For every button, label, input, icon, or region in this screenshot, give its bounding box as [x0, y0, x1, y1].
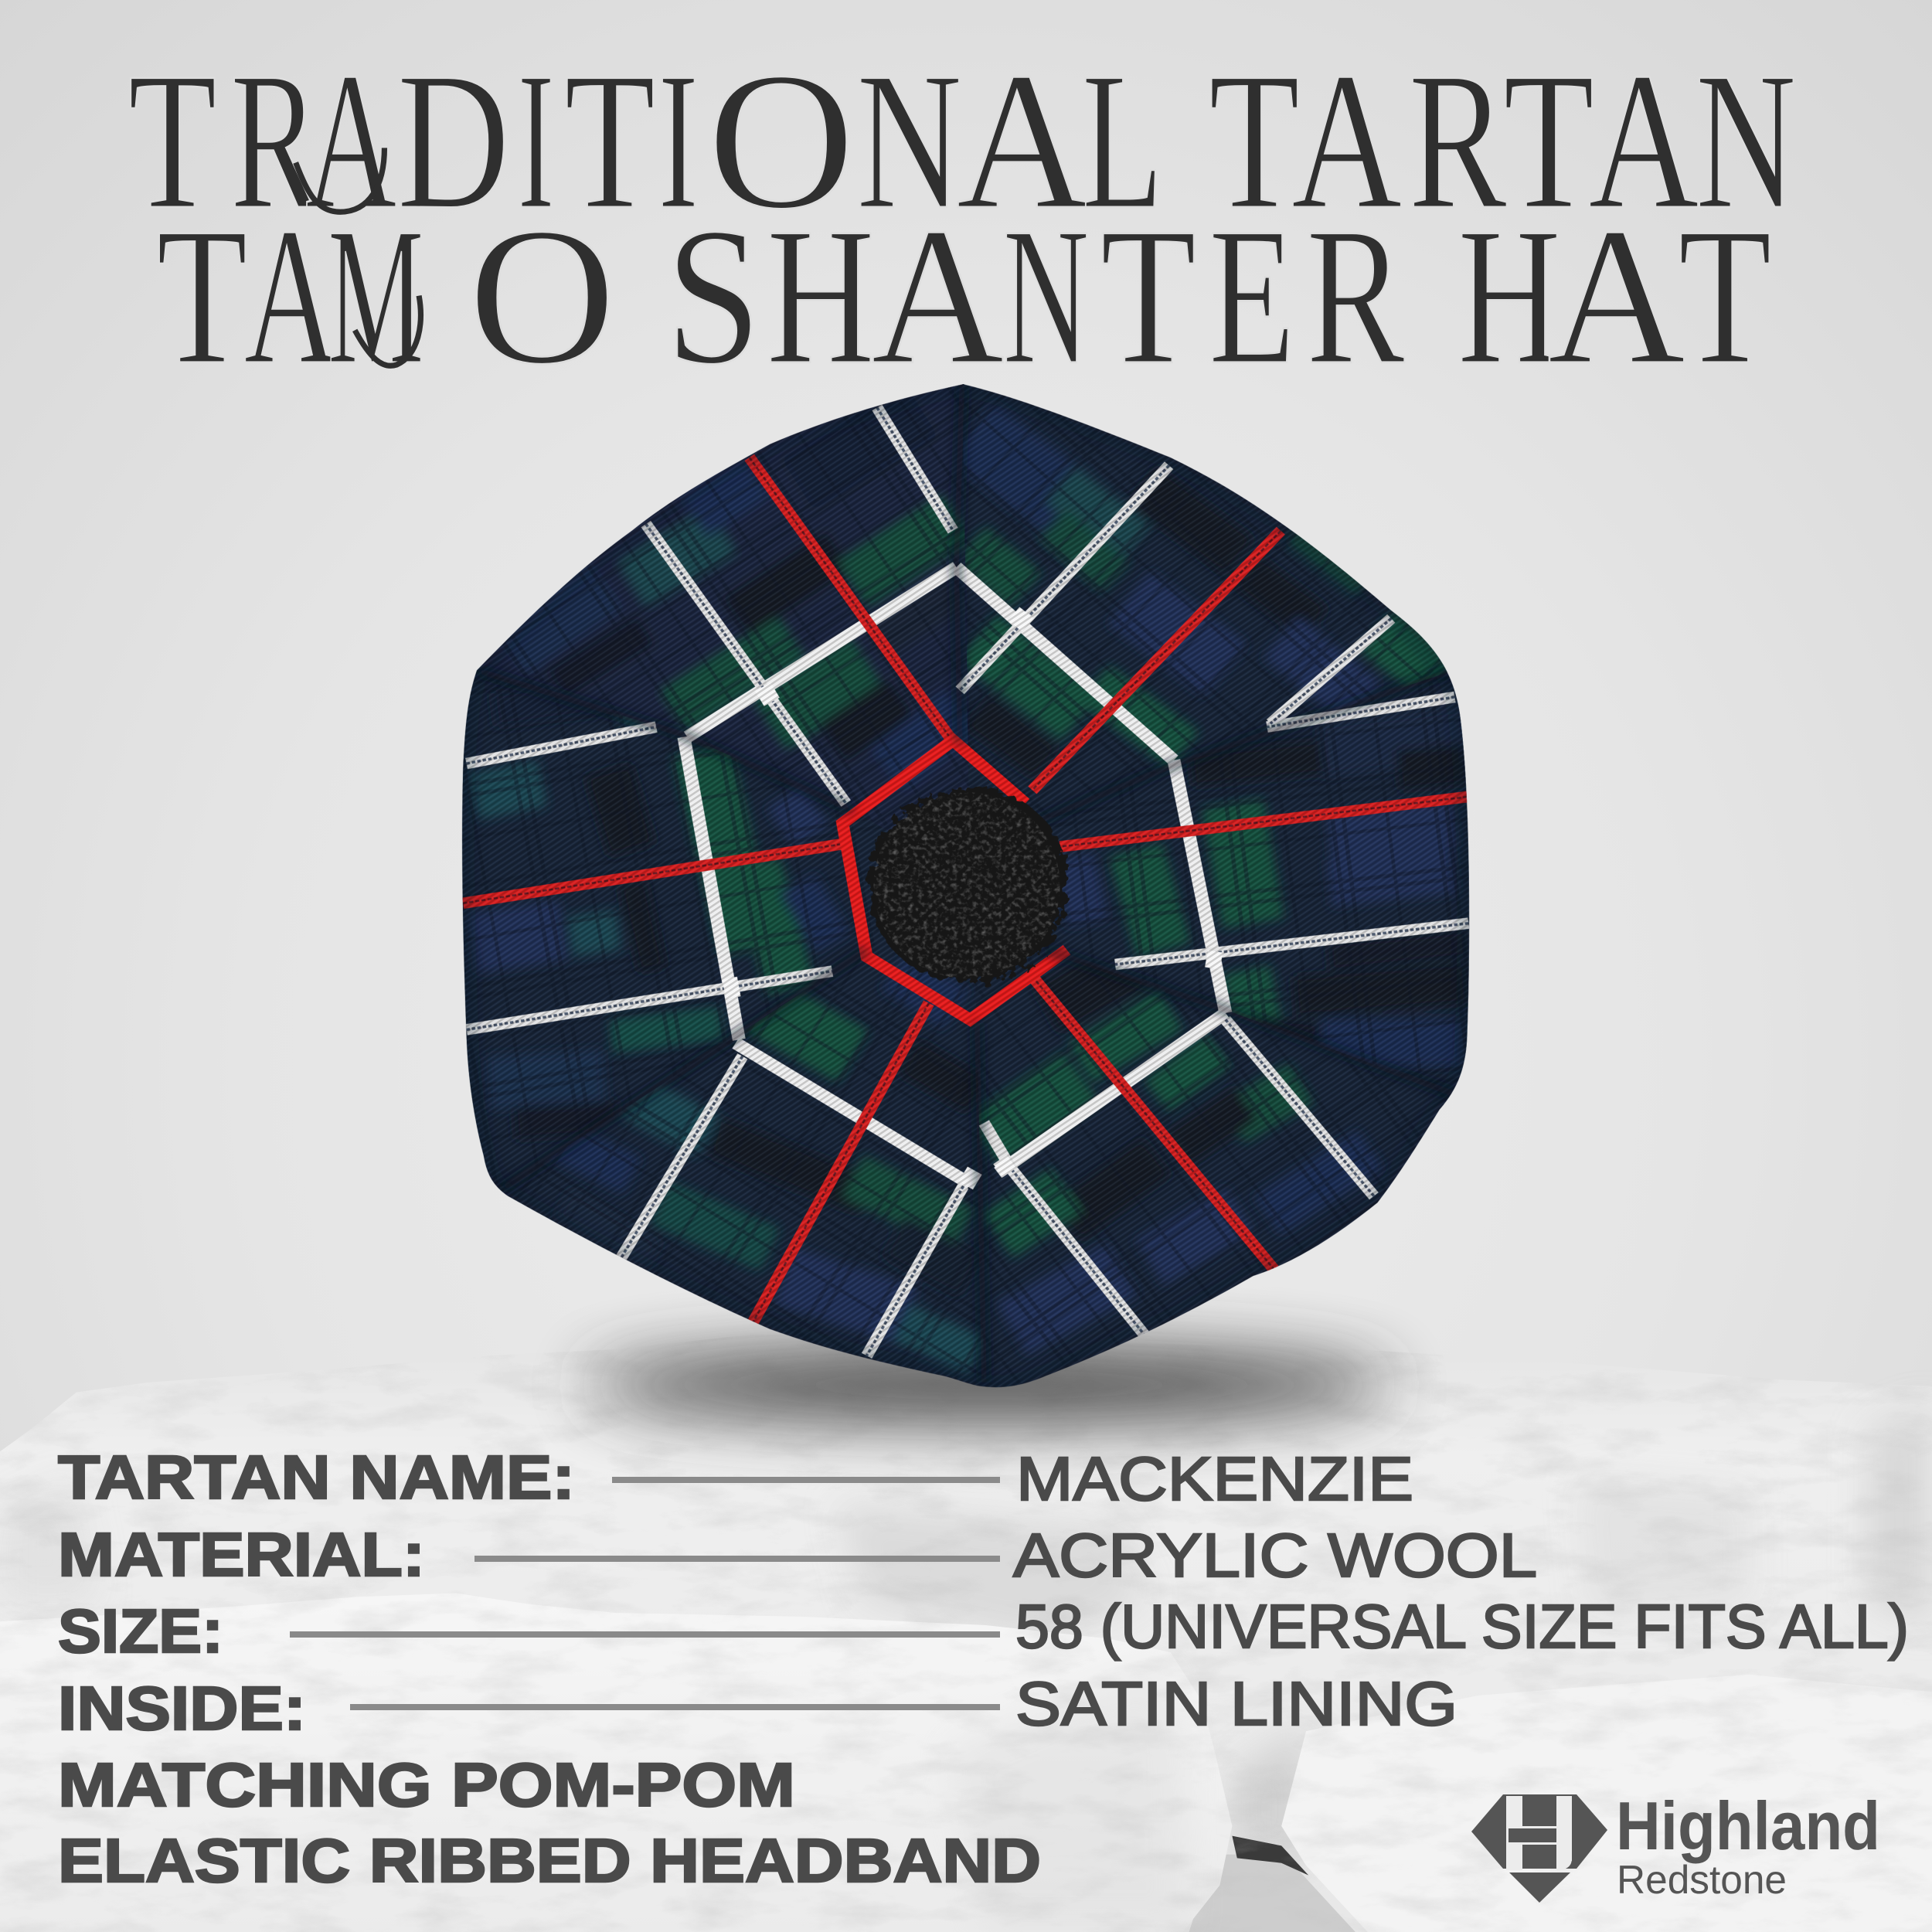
title line 1: D	[396, 32, 510, 250]
white stripes	[684, 567, 1226, 1184]
logo mark	[1471, 1794, 1607, 1903]
title line 2: T	[156, 188, 247, 406]
twill weave overlay	[425, 371, 1507, 1414]
title line 1: R	[1408, 32, 1507, 250]
panel: lower left	[549, 970, 977, 1355]
title line 2: A	[871, 188, 1004, 406]
panel: lower right	[984, 963, 1370, 1329]
red stripe weave	[463, 457, 1467, 1322]
title line 2: A	[244, 188, 338, 406]
panel: upper left	[477, 384, 968, 793]
title line 1: L	[1082, 32, 1163, 250]
title line 1: I	[658, 32, 699, 250]
title line 1: T	[1209, 32, 1300, 250]
spec labels: MATERIAL:	[58, 1520, 425, 1589]
white stripe crossings	[722, 607, 1223, 1189]
title	[128, 32, 1797, 406]
spec labels: ELASTIC RIBBED HEADBAND	[58, 1826, 1041, 1895]
spec labels	[58, 1443, 1041, 1895]
right small rock	[1281, 1675, 1932, 1932]
title line 2: T	[1679, 188, 1772, 406]
rock crevice shadow	[1232, 1836, 1308, 1876]
hat edge vignette	[462, 384, 1469, 1387]
title line 1: A	[1588, 32, 1699, 250]
hat shadow on rock	[587, 1348, 1391, 1422]
title line 1: N	[856, 32, 962, 250]
spec values: ACRYLIC WOOL	[1013, 1521, 1537, 1590]
logo subtitle: Redstone	[1617, 1858, 1787, 1903]
fabric base	[462, 384, 1470, 1388]
title line 1: N	[1696, 32, 1797, 250]
title line 2: R	[1306, 188, 1405, 406]
title line 2: S	[665, 188, 761, 406]
title line 2: A	[1548, 188, 1685, 406]
panel: upper right	[970, 430, 1447, 764]
front rock side shading	[949, 1663, 1189, 1932]
outer white stripes	[467, 407, 1468, 1355]
logo wordmark: Highland	[1616, 1787, 1880, 1864]
title line 2: O	[468, 188, 616, 406]
spec labels: SIZE:	[58, 1597, 223, 1665]
title line 1: T	[128, 32, 217, 250]
connector lines	[290, 1477, 1000, 1710]
stripe weave detail	[467, 407, 1468, 1355]
tartan hat	[462, 384, 1470, 1388]
title line 2: H	[1458, 188, 1561, 406]
title swash accents	[296, 148, 420, 366]
stone texture	[0, 1331, 1932, 1932]
red stripes	[463, 457, 1467, 1322]
back rock shading	[0, 1405, 1932, 1872]
spec values	[1013, 1444, 1909, 1738]
title line 1: A	[305, 32, 396, 250]
spec labels: TARTAN NAME:	[58, 1443, 575, 1512]
spec values: 58 (UNIVERSAL SIZE FITS ALL)	[1015, 1592, 1909, 1661]
title line 1: A	[956, 32, 1089, 250]
back rock	[0, 1335, 1932, 1932]
front left rock	[0, 1594, 1232, 1932]
title line 1: T	[1503, 32, 1594, 250]
title line 2: M	[328, 188, 423, 406]
title line 2: H	[767, 188, 875, 406]
title line 2: E	[1209, 188, 1295, 406]
panel seams	[477, 384, 1461, 1383]
title line 1: O	[707, 32, 855, 250]
title line 2: T	[1100, 188, 1196, 406]
inner red hexagon	[842, 740, 1066, 1019]
fine sett lines	[425, 371, 1507, 1414]
title line 1: T	[564, 32, 655, 250]
title line 1: R	[230, 32, 319, 250]
logo: Highland Redstone	[1471, 1787, 1880, 1903]
spec values: SATIN LINING	[1015, 1669, 1458, 1738]
pom-pom	[863, 784, 1070, 986]
spec values: MACKENZIE	[1016, 1444, 1413, 1513]
specifications	[58, 1443, 1909, 1895]
panel: right	[1073, 733, 1467, 1043]
spec labels: INSIDE:	[58, 1674, 306, 1743]
title line 2: N	[1003, 188, 1089, 406]
panel: left	[474, 697, 832, 1123]
title line 1: I	[518, 32, 554, 250]
title line 1: A	[1291, 32, 1402, 250]
floor gap	[1189, 1855, 1355, 1932]
spec labels: MATCHING POM-POM	[58, 1750, 795, 1819]
stone pedestal	[0, 1331, 1932, 1932]
